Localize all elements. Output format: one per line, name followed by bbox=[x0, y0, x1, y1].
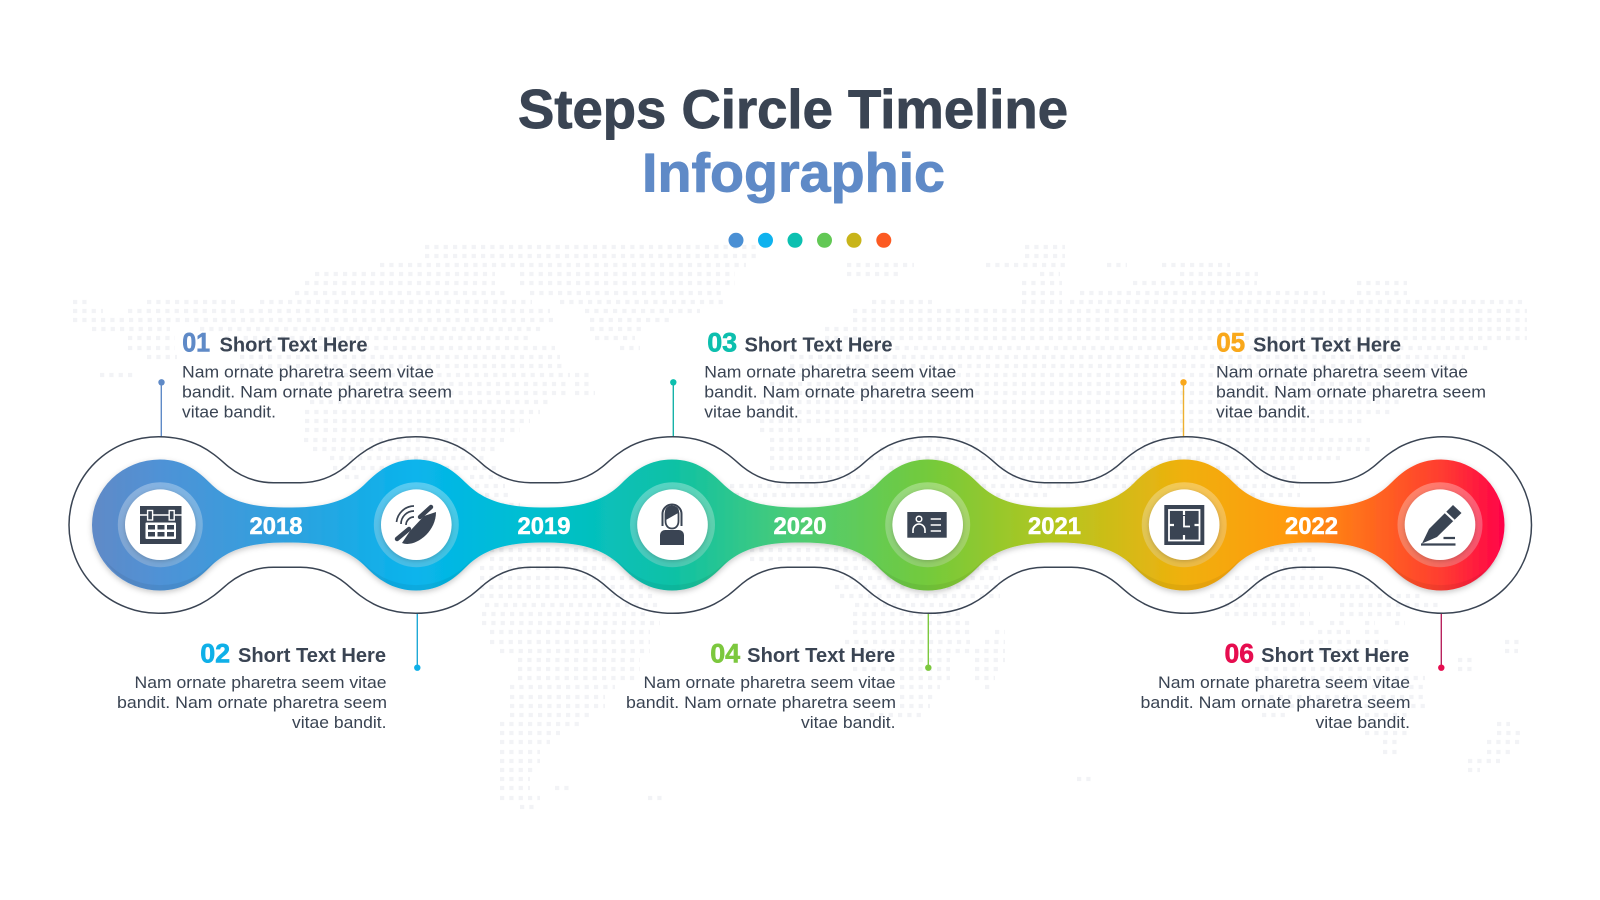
step 01 text: Short Text Here bbox=[220, 335, 368, 357]
step 01 text: bandit. Nam ornate pharetra seem bbox=[182, 382, 452, 402]
step 01 text: 01 bbox=[182, 328, 210, 358]
step 03 text: vitae bandit. bbox=[704, 402, 799, 422]
step 06 text bbox=[1140, 638, 1410, 732]
step 05 text: vitae bandit. bbox=[1216, 402, 1310, 422]
step 04 text bbox=[626, 638, 896, 732]
step 05 text: 05 bbox=[1216, 328, 1245, 358]
gradient connected band bbox=[92, 460, 1505, 590]
bulb lower shading bbox=[104, 559, 1497, 591]
world map dots bbox=[73, 247, 1527, 807]
step 02 text: Short Text Here bbox=[238, 645, 386, 667]
step 03 text: 03 bbox=[707, 328, 737, 358]
step 03 text bbox=[704, 328, 974, 422]
step 06 text: Short Text Here bbox=[1261, 645, 1409, 667]
step 06 text: bandit. Nam ornate pharetra seem bbox=[1140, 693, 1410, 712]
step 02 text: Nam ornate pharetra seem vitae bbox=[134, 673, 386, 692]
year labels: 2022 bbox=[1285, 513, 1338, 540]
step 02 text: bandit. Nam ornate pharetra seem bbox=[117, 693, 387, 712]
step 02 text: 02 bbox=[200, 638, 230, 668]
step 06 text: Nam ornate pharetra seem vitae bbox=[1158, 673, 1410, 692]
step 04 text: Nam ornate pharetra seem vitae bbox=[644, 673, 896, 692]
step 02 text: vitae bandit. bbox=[292, 713, 386, 732]
step 04 text: 04 bbox=[710, 638, 740, 668]
step 01 text: Nam ornate pharetra seem vitae bbox=[182, 362, 434, 382]
outer outline bbox=[69, 437, 1532, 613]
step 04 text: bandit. Nam ornate pharetra seem bbox=[626, 693, 896, 712]
step 06 text: vitae bandit. bbox=[1316, 713, 1410, 732]
icon: clock bbox=[1164, 505, 1204, 545]
step 05 text: Short Text Here bbox=[1253, 335, 1401, 357]
title: Infographic bbox=[642, 142, 945, 204]
step 03 text: bandit. Nam ornate pharetra seem bbox=[704, 382, 974, 402]
step 05 text bbox=[1216, 328, 1486, 422]
step 05 text: Nam ornate pharetra seem vitae bbox=[1216, 362, 1468, 382]
step 02 text bbox=[117, 638, 387, 732]
connector lines and dots bbox=[158, 379, 1445, 671]
step 03 text: Nam ornate pharetra seem vitae bbox=[704, 362, 956, 382]
icon: pencil bbox=[1421, 505, 1462, 544]
icon discs bbox=[118, 482, 1482, 567]
step 04 text: vitae bandit. bbox=[801, 713, 896, 732]
title bbox=[518, 78, 1068, 204]
year labels: 2021 bbox=[1028, 513, 1081, 540]
year labels: 2018 bbox=[250, 513, 302, 540]
title: Steps Circle Timeline bbox=[518, 78, 1068, 140]
step 03 text: Short Text Here bbox=[744, 335, 892, 357]
icon: id card bbox=[907, 512, 947, 538]
icon: calendar bbox=[140, 506, 182, 544]
step 01 text bbox=[182, 328, 452, 422]
decorative colour dots bbox=[728, 233, 891, 248]
year labels: 2020 bbox=[774, 513, 826, 540]
step 01 text: vitae bandit. bbox=[182, 402, 276, 422]
year labels bbox=[250, 513, 1338, 540]
step 04 text: Short Text Here bbox=[747, 645, 895, 667]
icon: person bbox=[660, 504, 684, 545]
icon: telephone bbox=[396, 506, 436, 544]
year labels: 2019 bbox=[518, 513, 570, 540]
step 05 text: bandit. Nam ornate pharetra seem bbox=[1216, 382, 1486, 402]
step 06 text: 06 bbox=[1224, 638, 1254, 668]
